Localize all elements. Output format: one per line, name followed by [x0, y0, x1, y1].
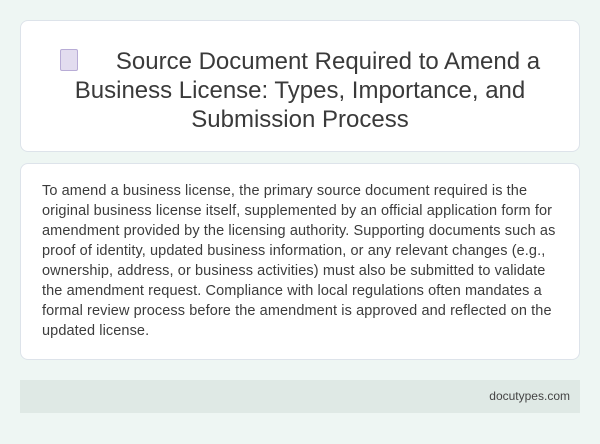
- footer: [20, 380, 580, 413]
- icon: document: [60, 49, 78, 71]
- footer: docutypes.com: [489, 389, 570, 403]
- text block: To amend a business license, the primary source document required is the original business license itself, supplemented by an official application form for amendment provided by the licensing authority. Supporting documents such as proof of identity, updated business information, or any relevant changes (e.g., ownership, address, or business activities) must also be submitted to validate the amendment request. Compliance with local regulations often mandates a formal review process before the amendment is approved and reflected on the updated license.: [42, 183, 555, 339]
- title: Source Document Required to Amend a Business License: Types, Importance, and Submission Process: [75, 48, 540, 133]
- panel: title card: [20, 20, 580, 152]
- panel: body text: [20, 163, 580, 360]
